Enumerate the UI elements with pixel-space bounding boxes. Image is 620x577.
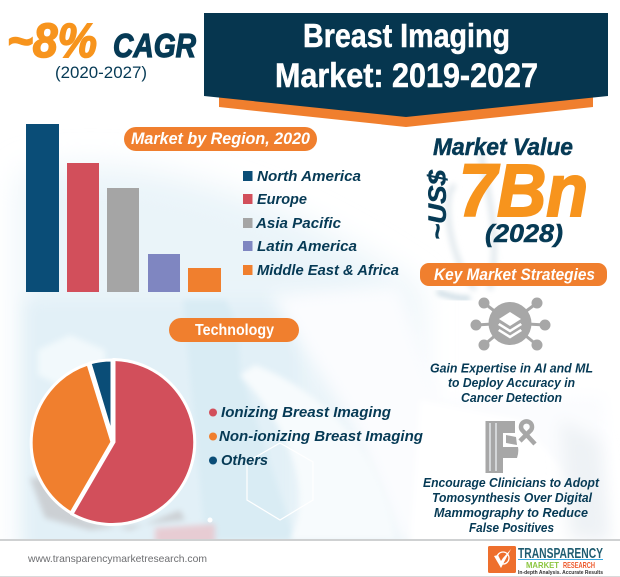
title banner — [204, 13, 608, 127]
text: strategy two: Mammography to Reduce — [434, 505, 588, 520]
text: strategy two: False Positives — [469, 520, 554, 535]
market value callout: Market Value — [433, 134, 573, 161]
faded photo background — [13, 150, 610, 539]
market value callout: (2028) — [485, 220, 563, 248]
legend: regions: Middle East & Africa — [257, 263, 399, 279]
legend: regions — [243, 169, 399, 279]
bar chart: market by region — [26, 124, 221, 292]
CAGR callout: ~8% — [7, 15, 97, 68]
text: strategy one: Cancer Detection — [461, 390, 562, 405]
market value callout — [424, 134, 588, 248]
icon: AI network layers — [472, 299, 549, 349]
title banner: Breast Imaging — [303, 17, 510, 54]
legend: technology — [209, 405, 423, 469]
website url: www.transparencymarketresearch.com — [27, 553, 207, 565]
icon: mammography machine and ribbon — [486, 421, 535, 473]
legend: technology: Others — [221, 453, 268, 469]
text: strategy two — [423, 475, 600, 535]
heading: technology: Technology — [195, 322, 274, 339]
legend: regions: North America — [257, 169, 361, 185]
CAGR callout — [7, 15, 196, 82]
market value callout: 7Bn — [459, 149, 588, 232]
text: strategy one: to Deploy Accuracy in — [448, 375, 575, 390]
CAGR callout: CAGR — [113, 27, 196, 64]
legend: technology: Non-ionizing Breast Imaging — [219, 429, 423, 445]
text: strategy two: Tomosynthesis Over Digital — [432, 490, 592, 505]
market value callout: ~US$ — [424, 169, 452, 240]
CAGR callout: (2020-2027) — [55, 63, 147, 82]
legend: regions: Asia Pacific — [255, 216, 341, 232]
legend: regions: Latin America — [257, 239, 357, 255]
title banner: Market: 2019-2027 — [275, 57, 538, 95]
text: strategy two: Encourage Clinicians to Adopt — [423, 475, 600, 490]
pie chart: technology — [30, 360, 196, 526]
text: strategy one: Gain Expertise in AI and ML — [430, 360, 593, 376]
logo: transparency market research: RESEARCH — [563, 560, 595, 570]
heading: key market strategies: Key Market Strategies — [434, 266, 595, 284]
logo: transparency market research: MARKET — [526, 560, 560, 570]
logo: transparency market research: In-depth Analysis. Accurate Results — [518, 570, 603, 576]
heading: technology — [169, 318, 299, 342]
logo: transparency market research — [488, 545, 603, 576]
legend: technology: Ionizing Breast Imaging — [221, 405, 391, 421]
footer rule and white band — [0, 539, 620, 577]
text: strategy one — [430, 360, 593, 405]
heading: market by region: Market by Region, 2020 — [131, 129, 311, 148]
legend: regions: Europe — [257, 192, 307, 208]
